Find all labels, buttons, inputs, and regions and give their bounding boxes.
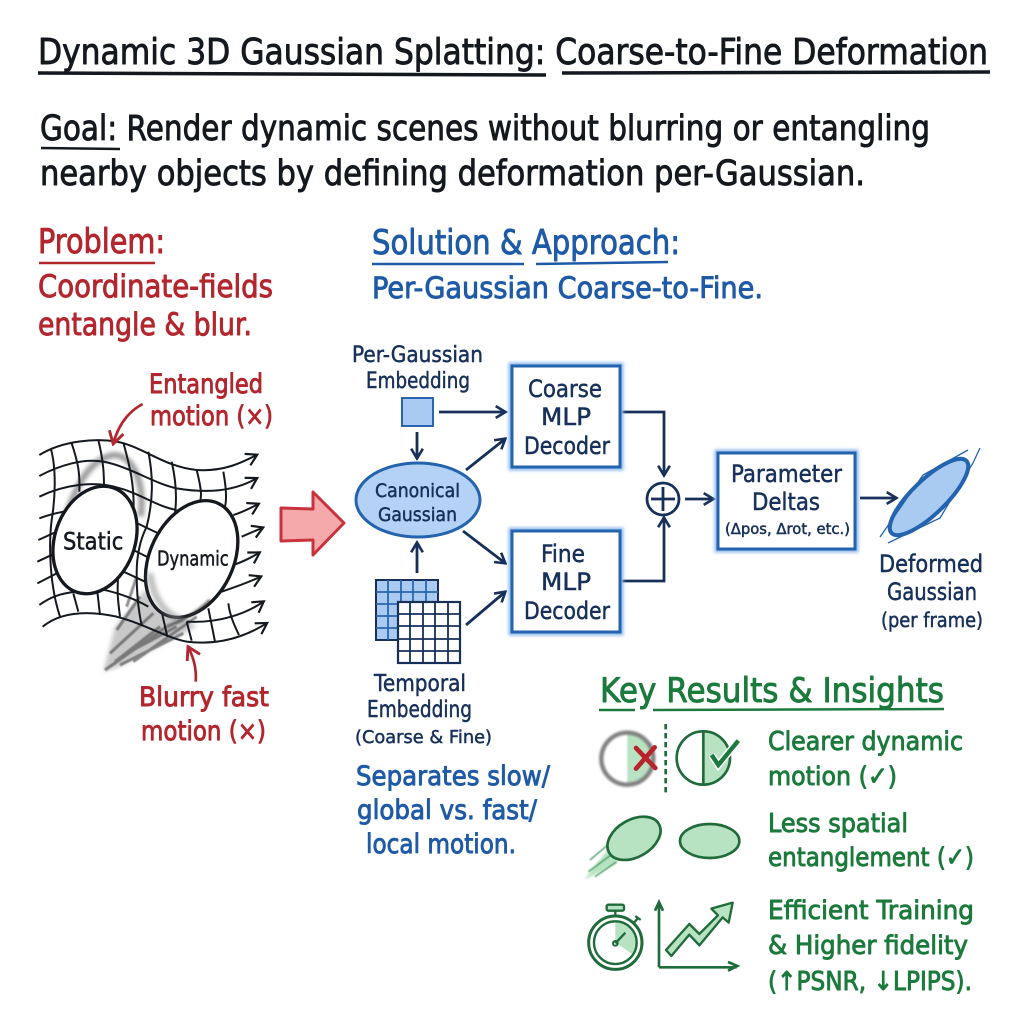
box: fine mlp decoder: Decoder	[524, 597, 610, 625]
box: parameter deltas: Deltas	[752, 488, 820, 516]
text: efficient training	[768, 896, 974, 997]
box: coarse mlp decoder: Coarse	[528, 375, 602, 403]
label: temporal embedding: (Coarse & Fine)	[355, 727, 492, 748]
note: separates motion: Separates slow/	[356, 761, 551, 792]
label: deformed gaussian: (per frame)	[881, 608, 983, 632]
icons: clearer motion comparison	[601, 724, 738, 796]
panel: solution heading: Per-Gaussian Coarse-to-Fine.	[372, 271, 763, 305]
icons: less entanglement ellipses	[584, 808, 739, 880]
icon: embedding square	[402, 398, 433, 426]
panel: key results heading: Key Results & Insights	[600, 671, 944, 711]
icon: temporal embedding grids	[376, 580, 460, 663]
text: efficient training: (↑PSNR, ↓LPIPS).	[768, 967, 972, 997]
goal statement: nearby objects by defining deformation per-Gaussian.	[40, 154, 865, 194]
node: canonical gaussian	[356, 463, 480, 537]
node: canonical gaussian: Gaussian	[378, 504, 457, 526]
label: per-gaussian embedding	[352, 343, 483, 394]
arrow: entangled pointer	[113, 404, 143, 443]
label: entangled motion	[149, 369, 273, 432]
label: deformed gaussian: Gaussian	[887, 578, 977, 606]
panel: solution heading: Solution & Approach:	[372, 223, 680, 263]
note: separates motion	[356, 761, 551, 860]
panel: problem heading: Problem:	[38, 222, 165, 262]
panel: problem heading: Coordinate-fields	[38, 269, 273, 305]
note: separates motion: local motion.	[366, 829, 516, 860]
label: entangled motion: Entangled	[149, 369, 263, 400]
label: blurry fast motion	[139, 682, 269, 747]
diagram: deformation field with static and dynamic objects	[37, 404, 267, 682]
panel: problem heading: entangle & blur.	[38, 307, 252, 343]
node: canonical gaussian: Canonical	[375, 480, 460, 502]
label: per-gaussian embedding: Embedding	[366, 369, 470, 394]
box: fine mlp decoder: MLP	[541, 568, 591, 596]
box: fine mlp decoder	[512, 531, 620, 632]
text: efficient training: Efficient Training	[768, 896, 974, 926]
text: less entanglement	[768, 809, 974, 873]
label: temporal embedding: Temporal	[373, 671, 466, 697]
icon: sum circle	[647, 483, 679, 515]
text: efficient training: & Higher fidelity	[768, 931, 968, 961]
text: clearer motion	[768, 727, 963, 792]
icon: stopwatch	[589, 905, 642, 969]
text: clearer motion: Clearer dynamic	[768, 727, 963, 757]
panel: solution heading	[372, 223, 763, 305]
goal statement	[40, 109, 930, 194]
label: dynamic: Dynamic	[157, 547, 229, 571]
text: less entanglement: entanglement (✓)	[768, 843, 974, 873]
box: fine mlp decoder: Fine	[541, 540, 585, 568]
label: per-gaussian embedding: Per-Gaussian	[352, 343, 483, 368]
note: separates motion: global vs. fast/	[357, 795, 538, 826]
label: temporal embedding	[355, 671, 492, 748]
label: blurry fast motion: motion (×)	[141, 716, 266, 747]
icon: deformed gaussian	[880, 448, 980, 545]
icon: rising chart	[655, 902, 737, 971]
label: blurry fast motion: Blurry fast	[139, 682, 269, 713]
box: parameter deltas: (Δpos, Δrot, etc.)	[725, 520, 850, 538]
box: coarse mlp decoder: Decoder	[524, 432, 610, 460]
box: parameter deltas	[718, 453, 855, 549]
label: deformed gaussian	[879, 550, 983, 632]
text: less entanglement: Less spatial	[768, 809, 908, 839]
box: coarse mlp decoder: MLP	[541, 403, 591, 431]
label: static: Static	[63, 527, 123, 555]
arrows: flow network	[417, 412, 896, 625]
label: temporal embedding: Embedding	[367, 697, 472, 723]
arrow: problem to solution	[281, 492, 344, 555]
arrow: blurry pointer	[188, 647, 196, 682]
text: clearer motion: motion (✓)	[768, 762, 897, 792]
label: deformed gaussian: Deformed	[879, 550, 983, 578]
panel: problem heading	[38, 222, 273, 343]
label: entangled motion: motion (×)	[150, 401, 273, 432]
box: parameter deltas: Parameter	[731, 460, 842, 488]
box: coarse mlp decoder	[512, 366, 620, 467]
